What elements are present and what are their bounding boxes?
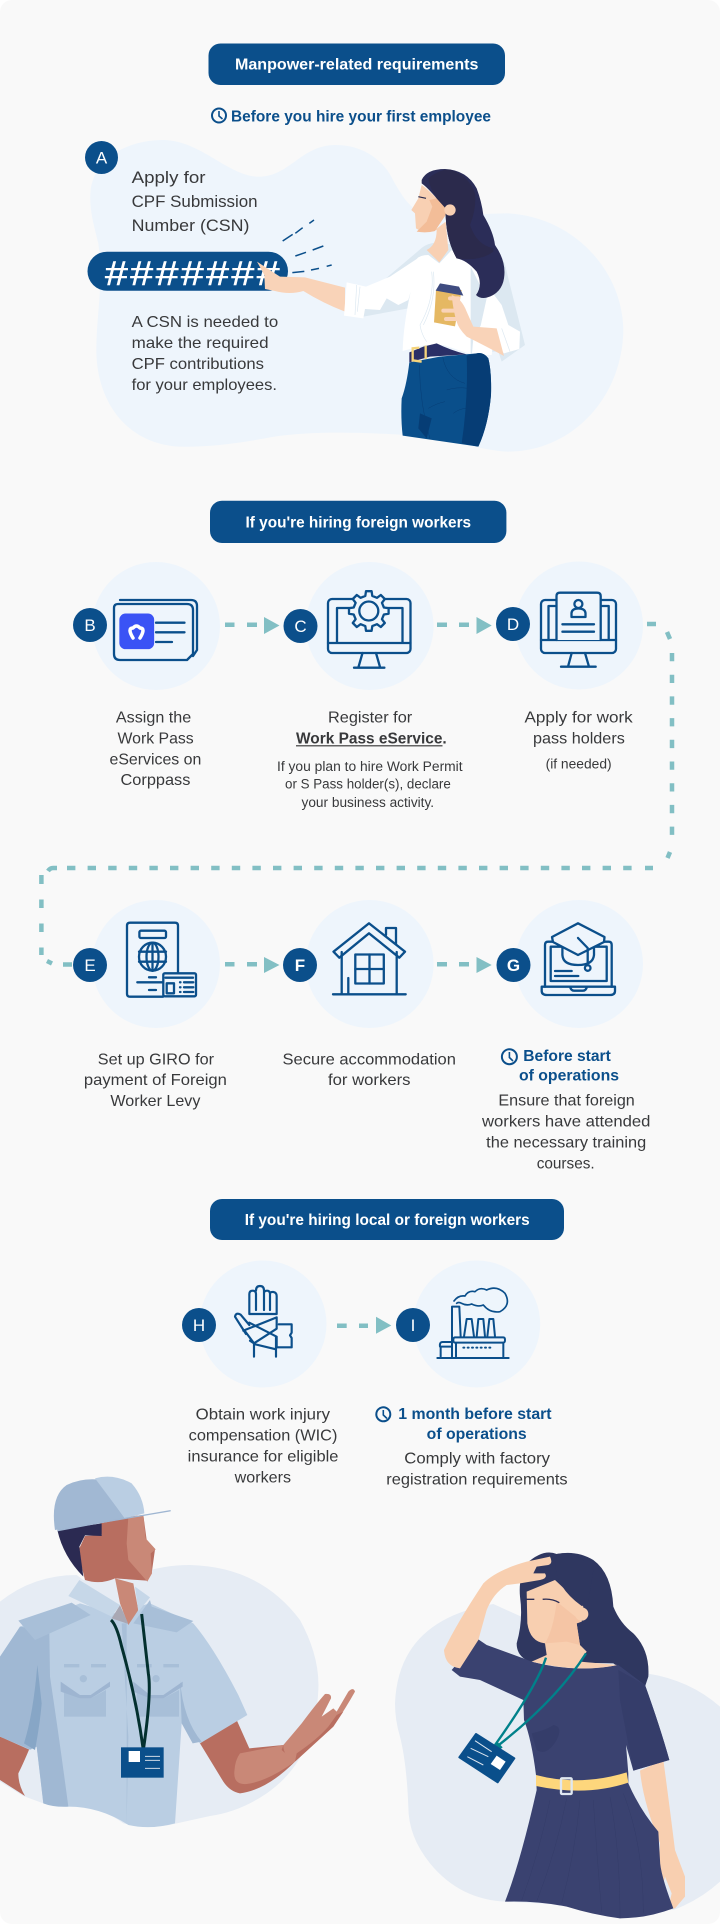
text F: Secure accommodation [282,1051,456,1068]
timing note I [376,1406,552,1443]
icon circle E [92,900,220,1028]
text I [386,1450,568,1489]
icon circle D [515,562,643,690]
text: apply for CSN: Apply for [132,168,206,187]
arrow F to G [437,957,492,973]
icon circle G [515,900,643,1028]
icon: monitor with gear [328,591,410,668]
icon: Corppass card [114,600,197,660]
badge F: F [295,956,305,975]
text: CSN explanation: for your employees. [132,377,277,394]
timing note I: 1 month before start [398,1406,552,1423]
text I: registration requirements [386,1472,568,1489]
text D: pass holders [533,730,625,747]
step B [73,562,220,789]
section: hiring foreign workers [41,501,672,1173]
arrow E to F [225,957,280,973]
heading pill: If you're hiring local or foreign workers [210,1199,564,1240]
icon: house [333,923,406,994]
icon circle C [306,562,434,690]
text E: Worker Levy [110,1093,200,1110]
step H [182,1260,339,1487]
timing note I: of operations [427,1426,527,1443]
text H: insurance for eligible [188,1449,339,1466]
text E: payment of Foreign [84,1072,227,1089]
icon circle I [413,1260,540,1388]
arrow H to I [337,1317,391,1334]
background blob A [90,140,623,452]
text D [524,710,634,771]
badge B: B [84,616,96,635]
text D: Apply for work [524,710,634,727]
step badge A [85,141,118,174]
arrow C to D [437,617,492,634]
text B: Corppass [120,772,190,789]
badge E [73,948,107,982]
timing note G: of operations [519,1068,619,1085]
heading pill: Manpower-related requirements [208,44,505,85]
text C: Register for [328,710,413,727]
illustration: woman pointing with coffee [257,169,525,447]
step D [496,562,643,771]
icon: factory [437,1288,509,1358]
text: apply for CSN: Number (CSN) [132,216,250,235]
illustration: woman shading her eyes with lanyard [395,1552,720,1918]
text B [110,710,201,789]
icon: passport and ID card [127,923,196,997]
text E [84,1051,227,1110]
text: CSN explanation: A CSN is needed to [132,314,278,331]
text B: eServices on [110,751,201,768]
text: CSN explanation [132,314,278,394]
step badge A: A [96,148,108,168]
heading pill: If you're hiring foreign workers [210,501,506,543]
text B: Assign the [116,710,191,727]
text H [188,1406,339,1487]
section: hiring local or foreign workers [182,1199,568,1489]
badge G [496,948,530,982]
text G: workers have attended [481,1114,650,1131]
icon circle B [92,562,220,690]
icon: laptop with graduation cap [542,923,615,995]
step G [481,900,650,1173]
text: apply for CSN: CPF Submission [132,192,258,211]
CSN number pill [88,252,288,293]
text C: Work Pass eService. [296,730,447,747]
text I: Comply with factory [404,1450,550,1467]
timing note G [502,1048,619,1085]
text C: If you plan to hire Work Permit [277,759,463,774]
step E [73,900,227,1110]
text: CSN explanation: CPF contributions [132,356,264,373]
text G [481,1093,650,1173]
dashed connector D to E [41,624,672,964]
timing note: before you hire: Before you hire your first employee [231,108,491,126]
badge H [182,1308,216,1342]
step C [277,562,463,810]
step I [376,1260,568,1489]
badge G: G [507,956,520,975]
badge F [283,948,317,982]
text H: compensation (WIC) [189,1428,337,1445]
badge C: C [294,617,307,636]
text C: or S Pass holder(s), declare [285,777,451,792]
badge B [73,608,107,642]
section: manpower-related requirements [85,44,623,452]
text D: (if needed) [546,756,612,771]
text H: Obtain work injury [196,1406,330,1423]
heading pill: If you're hiring local or foreign workers: If you're hiring local or foreign workers [245,1212,530,1229]
heading pill: Manpower-related requirements: Manpower-related requirements [235,56,478,74]
text G: Ensure that foreign [498,1093,635,1110]
heading pill: If you're hiring foreign workers: If you're hiring foreign workers [246,514,471,532]
illustration: man in uniform with lanyard [0,1477,355,1827]
icon: monitor with profile document [541,593,616,667]
text E: Set up GIRO for [98,1051,215,1068]
text F: for workers [328,1072,410,1089]
arrow B to C [225,617,280,634]
text C: your business activity. [302,795,434,810]
icon: bandaged hand [235,1286,292,1357]
timing note G: Before start [523,1048,611,1065]
badge I [396,1308,430,1342]
step F [282,900,456,1089]
badge C [284,609,318,643]
text: CSN explanation: make the required [132,335,269,352]
text G: courses. [537,1156,595,1173]
badge I: I [411,1316,415,1335]
icon circle F [306,900,434,1028]
badge D: D [507,615,519,634]
text B: Work Pass [118,730,194,747]
text G: the necessary training [486,1135,646,1152]
badge D [496,607,530,641]
text C [277,710,463,810]
text: apply for CSN [132,168,258,235]
text F [282,1051,456,1089]
badge E: E [84,956,96,975]
badge H: H [193,1316,205,1335]
CSN number pill: ####### [105,255,282,293]
text H: workers [234,1470,291,1487]
icon circle H [200,1260,326,1388]
